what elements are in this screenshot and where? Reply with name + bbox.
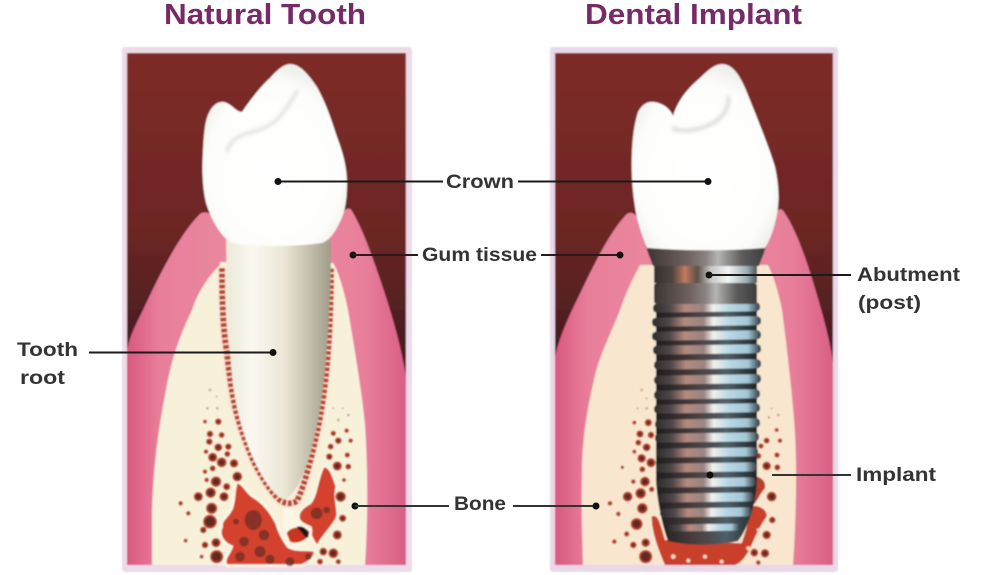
label: Bone: Bone — [454, 494, 506, 515]
label: Implant — [706, 465, 937, 486]
bone marrow — [609, 389, 781, 565]
crown ridge detail — [672, 96, 728, 130]
label: Abutment (post): Abutment — [857, 265, 961, 286]
gum tissue — [555, 209, 833, 565]
panel frame — [550, 47, 838, 572]
abutment lower band — [654, 283, 757, 304]
label: Tooth root: root — [20, 368, 66, 389]
panel background — [555, 53, 833, 565]
periodontal ligament — [222, 268, 331, 503]
threads — [652, 302, 761, 532]
crown — [202, 64, 347, 246]
implant body — [656, 300, 757, 545]
bone — [152, 262, 367, 565]
abutment top band — [646, 246, 766, 266]
bone pores — [179, 419, 352, 564]
label: Crown: Crown — [446, 172, 514, 193]
marrow dark spots — [233, 507, 330, 566]
crown ridge detail — [227, 90, 298, 152]
bone pores faint — [206, 389, 350, 421]
panel frame — [122, 47, 412, 572]
abutment — [646, 246, 766, 304]
label: Abutment (post) — [706, 265, 961, 314]
apex dark — [297, 526, 309, 538]
label: Tooth root: Tooth — [17, 340, 78, 361]
label: Implant: Implant — [856, 465, 937, 486]
gum tissue — [127, 209, 406, 565]
label: Crown — [274, 172, 712, 193]
panel: dental implant — [550, 47, 838, 572]
label: Tooth root — [17, 340, 276, 389]
periodontal ligament halo — [222, 268, 331, 503]
label: Bone — [352, 494, 600, 515]
bone pores — [609, 420, 781, 564]
marrow gaps — [283, 502, 312, 547]
label: Gum tissue: Gum tissue — [422, 245, 537, 266]
crown — [632, 64, 779, 250]
label: Abutment (post): (post) — [858, 293, 921, 314]
marrow mottling — [671, 528, 760, 564]
panel: natural tooth — [122, 47, 412, 572]
marrow apex — [287, 527, 309, 543]
abutment middle band — [654, 266, 757, 283]
label: Gum tissue — [350, 245, 624, 266]
marrow blob — [652, 506, 767, 565]
bone — [582, 265, 796, 565]
bone marrow — [179, 389, 352, 566]
marrow blob right — [299, 466, 337, 546]
panel background — [127, 53, 406, 565]
tooth root — [226, 240, 331, 499]
bone pores faint — [637, 389, 780, 419]
implant screw — [652, 300, 761, 545]
marrow blob upper right — [752, 476, 765, 505]
marrow blob left — [220, 482, 315, 566]
